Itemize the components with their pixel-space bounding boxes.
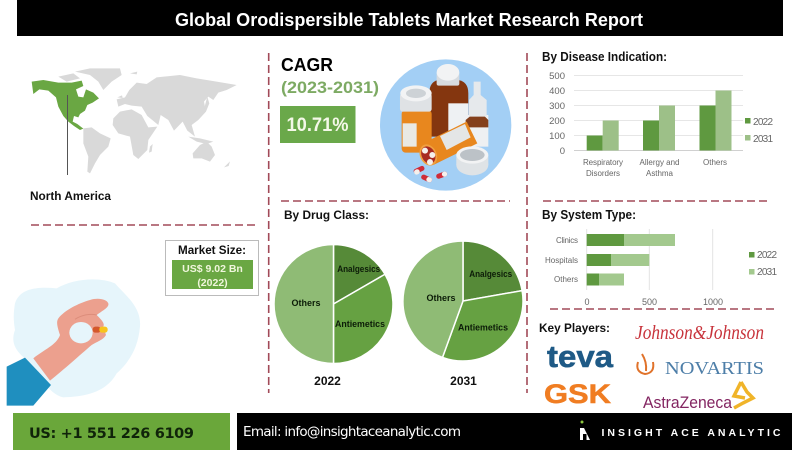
panel: disease indication chart: Asthma bbox=[646, 169, 674, 178]
pie year labels bbox=[314, 374, 477, 388]
world map bbox=[32, 68, 237, 173]
footer: contact bbox=[237, 413, 792, 450]
panel: CAGR bbox=[280, 55, 379, 143]
panel: system type chart: Hospitals bbox=[545, 256, 578, 265]
panel: disease indication chart: 100 bbox=[549, 131, 565, 142]
panel: system type chart: Others bbox=[554, 275, 578, 284]
logo: GSK: GSK bbox=[544, 379, 612, 409]
pie year labels: 2022 bbox=[314, 374, 341, 388]
panel: system type chart bbox=[542, 208, 777, 307]
icon: hand holding pill bbox=[7, 279, 140, 406]
panel: drug class bbox=[274, 208, 523, 388]
logo: Johnson & Johnson: Johnson&Johnson bbox=[635, 322, 764, 344]
logo: Insight Ace Analytic: INSIGHT ACE ANALYTIC bbox=[602, 427, 781, 439]
panel: system type chart: 0 bbox=[584, 297, 590, 307]
legend bbox=[745, 117, 773, 145]
pointer line bbox=[66, 95, 68, 175]
panel: system type chart: 500 bbox=[642, 297, 657, 307]
pie chart 2022: Others bbox=[292, 298, 320, 308]
heading: drug class: By Drug Class: bbox=[284, 208, 369, 222]
panel: disease indication chart: Others bbox=[703, 158, 727, 167]
pie chart 2031: Analgesics bbox=[469, 269, 512, 279]
panel: disease indication chart bbox=[542, 50, 773, 178]
footer: contact: Email: info@insightaceanalytic.com bbox=[243, 424, 461, 440]
panel: system type chart: 1000 bbox=[703, 297, 723, 307]
logo: Insight Ace Analytic bbox=[580, 420, 781, 440]
panel: CAGR: CAGR bbox=[281, 55, 333, 75]
icon: medicine bottles bbox=[380, 59, 511, 191]
logo: AstraZeneca bbox=[643, 382, 753, 412]
logo: Novartis bbox=[637, 354, 764, 378]
logo: Novartis: NOVARTIS bbox=[665, 358, 764, 378]
panel: disease indication chart: Disorders bbox=[586, 169, 620, 178]
title: Global Orodispersible Tablets Market Research Report bbox=[175, 10, 643, 30]
panel: CAGR: 10.71% bbox=[286, 115, 349, 136]
pie chart 2031 bbox=[403, 241, 523, 361]
heading: system type: By System Type: bbox=[542, 208, 636, 222]
panel: key players bbox=[539, 321, 764, 412]
panel: CAGR: (2023-2031) bbox=[281, 78, 379, 97]
panel: disease indication chart: Respiratory bbox=[583, 158, 623, 167]
bars bbox=[587, 234, 675, 286]
panel: disease indication chart: 0 bbox=[560, 146, 565, 157]
panel: market size bbox=[166, 240, 258, 296]
footer: phone: US: +1 551 226 6109 bbox=[29, 426, 194, 442]
heading: key players: Key Players: bbox=[539, 321, 610, 335]
legend bbox=[749, 250, 777, 278]
panel: region map bbox=[30, 68, 237, 203]
panel: market size: US$ 9.02 Bn bbox=[182, 263, 243, 275]
panel: market size: (2022) bbox=[197, 277, 228, 289]
pie chart 2031: Others bbox=[426, 293, 456, 303]
logo: AstraZeneca: AstraZeneca bbox=[643, 393, 732, 412]
footer: phone bbox=[13, 413, 230, 450]
heading: disease indication: By Disease Indication: bbox=[542, 50, 667, 64]
title bbox=[17, 0, 783, 36]
panel: disease indication chart: Allergy and bbox=[640, 158, 680, 167]
bars bbox=[587, 90, 732, 150]
panel: disease indication chart: 500 bbox=[549, 71, 565, 82]
legend: 2022 bbox=[757, 250, 777, 261]
panel: disease indication chart: 400 bbox=[549, 86, 565, 97]
panel: disease indication chart: 300 bbox=[549, 101, 565, 112]
pie chart 2022: Analgesics bbox=[337, 264, 380, 274]
legend: 2031 bbox=[757, 267, 777, 278]
region label: North America bbox=[30, 189, 111, 203]
pie chart 2022 bbox=[274, 244, 393, 364]
legend: 2022 bbox=[753, 117, 773, 128]
panel: market size: Market Size: bbox=[178, 243, 246, 257]
legend: 2031 bbox=[753, 134, 773, 145]
pie chart 2022: Antiemetics bbox=[335, 319, 385, 329]
logo: Teva: teva bbox=[547, 339, 614, 374]
pie year labels: 2031 bbox=[450, 374, 477, 388]
panel: system type chart: Clinics bbox=[556, 236, 578, 245]
panel: disease indication chart: 200 bbox=[549, 116, 565, 127]
pie chart 2031: Antiemetics bbox=[458, 322, 508, 332]
